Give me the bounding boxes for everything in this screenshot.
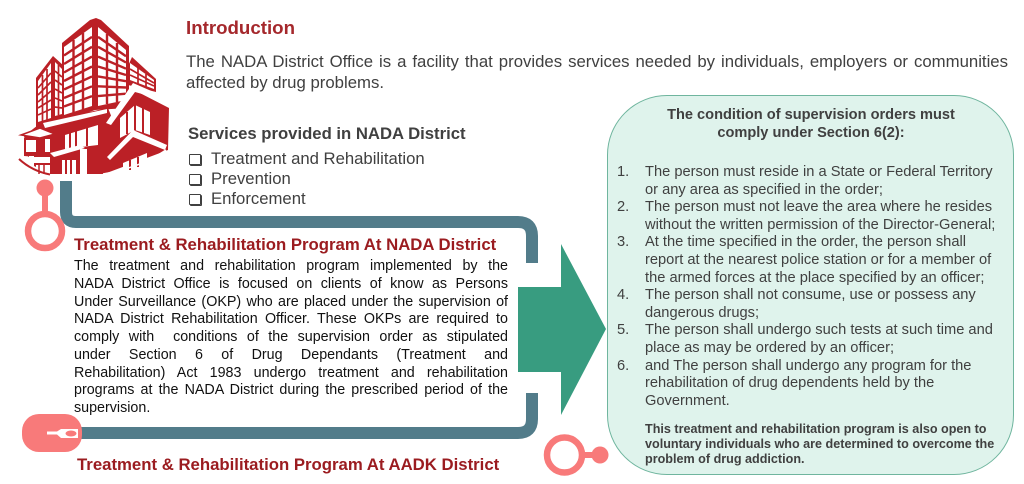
condition 2 xyxy=(617,199,995,233)
text: program description: under Section 6 of Drug Dependants (Treatment and xyxy=(74,347,508,363)
condition 1 xyxy=(617,164,993,198)
text: program description: NADA District Rehabilitation Officer. These OKPs are required to xyxy=(74,311,508,327)
condition 1: 1. xyxy=(617,164,629,180)
icon: bottom right pink node xyxy=(547,438,608,472)
top teal connector xyxy=(66,181,532,263)
condition 6: 6. xyxy=(617,358,629,374)
condition 3: the armed forces at the place specified by an officer; xyxy=(645,270,984,286)
icon: red building xyxy=(19,18,172,174)
list item: treatment: Treatment and Rehabilitation xyxy=(211,149,425,168)
list: services xyxy=(189,149,425,208)
heading: services: Services provided in NADA District xyxy=(188,124,466,143)
text: program description: The treatment and rehabilitation program implemented by the xyxy=(74,258,508,274)
condition 5: 5. xyxy=(617,322,629,338)
condition 5: place as may be ordered by an officer; xyxy=(645,340,894,356)
condition 3: report at the nearest police station or for a member of xyxy=(645,252,991,268)
text: voluntary note: This treatment and rehabilitation program is also open to xyxy=(645,422,986,436)
arrow xyxy=(518,244,606,415)
list item: prevention: Prevention xyxy=(211,169,291,188)
text: program description: Under Surveillance (OKP) who are placed under the supervision of xyxy=(74,294,508,310)
condition 3: 3. xyxy=(617,234,629,250)
condition 4: dangerous drugs; xyxy=(645,305,759,321)
condition 6: and The person shall undergo any program for the xyxy=(645,358,971,374)
condition 2: without the written permission of the Director-General; xyxy=(645,217,995,233)
condition 2: 2. xyxy=(617,199,629,215)
heading: supervision conditions: comply under Section 6(2): xyxy=(717,125,905,141)
text: program description: programs at the NADA District during the prescribed period of the xyxy=(74,382,508,398)
text: voluntary note xyxy=(645,422,994,466)
text: program description: Rehabilitation) Act 1983 undergo treatment and rehabilitation xyxy=(74,364,508,380)
condition 4: 4. xyxy=(617,287,629,303)
bottom teal connector xyxy=(78,393,532,433)
text: program description xyxy=(74,258,508,416)
panel: supervision conditions background xyxy=(607,95,1014,474)
condition 1: The person must reside in a State or Federal Territory xyxy=(645,164,993,180)
condition 4: The person shall not consume, use or possess any xyxy=(645,287,976,303)
text: program description: NADA District Office is focused on clients of know as Persons xyxy=(74,276,508,292)
icon: top left pink node xyxy=(28,180,62,248)
condition 3: At the time specified in the order, the person shall xyxy=(645,234,966,250)
condition 6: Government. xyxy=(645,393,730,409)
condition 6: rehabilitation of drug dependents held by the xyxy=(645,375,934,391)
icon: bottom left pink plug xyxy=(22,414,82,452)
text: voluntary note: voluntary individuals who are determined to overcome the xyxy=(645,437,994,451)
heading: supervision conditions: The condition of supervision orders must xyxy=(667,107,955,123)
text: introduction paragraph: affected by drug problems. xyxy=(186,73,384,92)
text: introduction paragraph: The NADA District Office is a facility that provides services needed by individuals, employers or communities xyxy=(186,52,1008,71)
condition 6 xyxy=(617,358,971,409)
condition 4 xyxy=(617,287,976,321)
heading: supervision conditions xyxy=(667,107,955,141)
condition 5 xyxy=(617,322,993,356)
text: program description: comply with conditions of the supervision order as stipulated xyxy=(74,329,508,345)
heading: NADA program: Treatment & Rehabilitation Program At NADA District xyxy=(74,235,496,254)
title: Introduction: Introduction xyxy=(186,17,295,38)
text: introduction paragraph xyxy=(186,52,1008,92)
text: program description: supervision. xyxy=(74,400,150,416)
heading: AADK program: Treatment & Rehabilitation Program At AADK District xyxy=(77,455,499,474)
text: voluntary note: problem of drug addiction. xyxy=(645,452,805,466)
list item: enforcement: Enforcement xyxy=(211,189,306,208)
condition 5: The person shall undergo such tests at such time and xyxy=(645,322,993,338)
condition 2: The person must not leave the area where he resides xyxy=(645,199,992,215)
condition 1: or any area as specified in the order; xyxy=(645,182,883,198)
condition 3 xyxy=(617,234,992,286)
list: supervision conditions xyxy=(617,164,995,409)
